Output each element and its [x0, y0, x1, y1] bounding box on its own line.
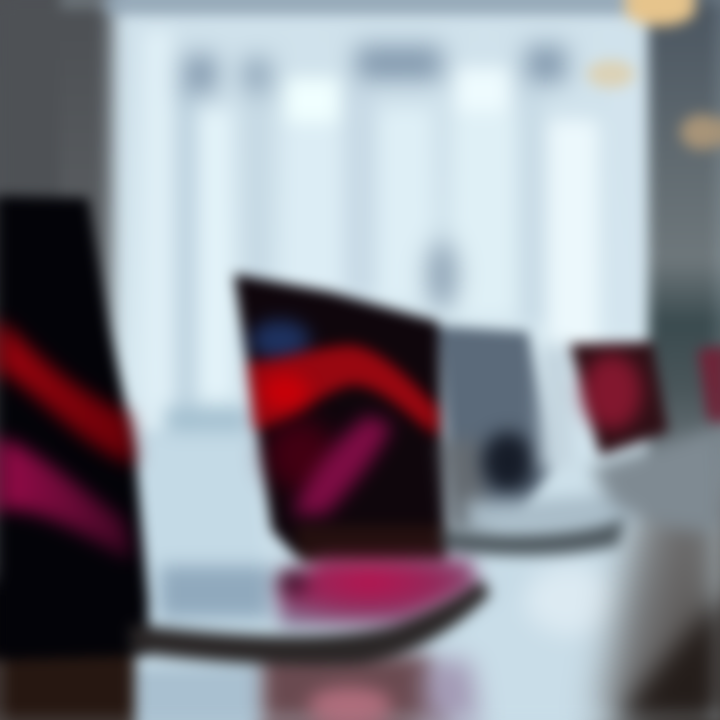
third laptop hinge shade [440, 440, 490, 530]
third laptop dark lower screen [482, 432, 534, 492]
fourth laptop red wave [582, 354, 642, 430]
centre laptop blue corner [250, 320, 310, 360]
table surface [0, 408, 720, 720]
gap between third and fourth laptops [540, 345, 572, 470]
ceiling lights [587, 0, 720, 150]
laptop: fourth [570, 342, 668, 455]
centre laptop bright red glow [261, 374, 309, 410]
centre laptop base edge [130, 580, 490, 665]
laptop: left foreground [0, 196, 148, 660]
centre laptop keyboard reflection [278, 558, 480, 626]
laptop: far right [590, 346, 720, 531]
laptop: centre [130, 274, 490, 665]
centre laptop keyboard dark left corner [276, 568, 308, 596]
left laptop screen [0, 196, 148, 660]
far right laptop screen [698, 346, 720, 425]
far right laptop bases [590, 425, 720, 531]
third laptop base [465, 492, 636, 534]
window column heads [184, 46, 566, 309]
third laptop base edge [440, 518, 625, 555]
centre laptop magenta wave [292, 415, 392, 515]
laptop: third [438, 326, 636, 555]
left laptop magenta wave [0, 438, 132, 560]
centre laptop screen lower glow [266, 419, 334, 491]
centre laptop screen [234, 274, 446, 555]
window columns [143, 30, 638, 460]
fourth laptop screen [570, 342, 668, 455]
centre laptop red wave [248, 345, 438, 436]
third laptop screen [438, 326, 552, 525]
centre laptop dark chin [295, 525, 446, 562]
left laptop red wave [0, 320, 136, 465]
